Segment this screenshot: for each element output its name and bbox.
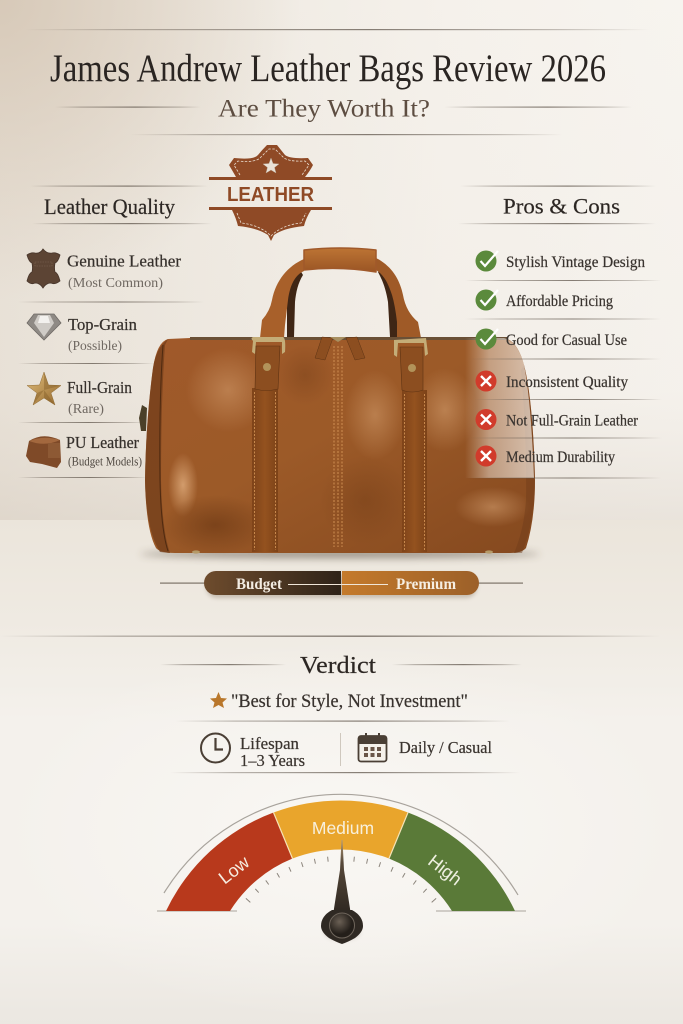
lifespan: 1–3 Years bbox=[240, 751, 305, 770]
heading: verdict: Verdict bbox=[300, 653, 376, 679]
gauge segment: low bbox=[166, 812, 292, 911]
pro: affordable pricing: Affordable Pricing bbox=[506, 293, 613, 310]
subtitle: Are They Worth It? bbox=[218, 96, 430, 122]
bottom studs bbox=[192, 550, 493, 554]
zipper pulls bbox=[315, 337, 365, 360]
con: inconsistent quality bbox=[476, 370, 628, 392]
pro: good for casual use bbox=[476, 328, 627, 350]
icon: clock bbox=[201, 734, 230, 762]
lifespan bbox=[240, 734, 305, 770]
gauge bbox=[157, 794, 526, 944]
item: genuine leather: (Most Common) bbox=[68, 275, 163, 290]
bag fade overlay bbox=[465, 338, 534, 478]
pro: stylish vintage design: Stylish Vintage Design bbox=[506, 254, 645, 271]
icon: pu leather bbox=[26, 436, 61, 468]
con: medium durability: Medium Durability bbox=[506, 449, 615, 466]
item: top-grain: Top-Grain bbox=[68, 315, 137, 334]
item: pu leather bbox=[66, 433, 142, 468]
gauge: High bbox=[424, 851, 466, 889]
leather duffel bag bbox=[139, 248, 535, 555]
right strap bbox=[394, 338, 428, 552]
center seams bbox=[334, 346, 342, 547]
icon: calendar bbox=[358, 733, 386, 762]
gauge outer arc bbox=[164, 794, 518, 895]
item: genuine leather bbox=[67, 252, 182, 290]
gauge segment: high bbox=[389, 812, 515, 911]
lifespan: Lifespan bbox=[240, 734, 299, 753]
badge text: LEATHER bbox=[227, 184, 315, 206]
item: full-grain: Full-Grain bbox=[67, 378, 132, 397]
item: full-grain: (Rare) bbox=[68, 401, 104, 416]
pro: affordable pricing bbox=[476, 290, 613, 310]
budget segment bbox=[204, 571, 341, 595]
con: medium durability bbox=[476, 446, 615, 466]
title block bbox=[25, 29, 650, 135]
panel: verdict bbox=[160, 653, 522, 773]
panel: leather quality bbox=[18, 186, 212, 478]
panel: pros and cons bbox=[458, 186, 662, 478]
item: pu leather: PU Leather bbox=[66, 433, 139, 452]
con: not full-grain leather bbox=[476, 409, 639, 430]
pro: good for casual use: Good for Casual Use bbox=[506, 332, 627, 349]
budget to premium scale: Premium bbox=[396, 576, 456, 593]
quote with star: "Best for Style, Not Investment" bbox=[231, 691, 468, 712]
left strap bbox=[252, 337, 285, 552]
bag handle bbox=[260, 248, 421, 338]
con: inconsistent quality: Inconsistent Quality bbox=[506, 374, 628, 391]
budget to premium scale: Budget bbox=[236, 576, 283, 593]
daily casual: Daily / Casual bbox=[399, 738, 492, 757]
icon: diamond bbox=[27, 314, 61, 340]
gauge segment: medium bbox=[274, 800, 408, 858]
gauge ticks bbox=[246, 857, 436, 902]
heading: pros and cons: Pros & Cons bbox=[503, 194, 620, 218]
logo: leather badge bbox=[209, 145, 332, 241]
bag shadow bbox=[140, 550, 540, 558]
premium segment bbox=[342, 571, 479, 595]
side clasp bbox=[139, 405, 147, 431]
gauge: Medium bbox=[312, 818, 374, 838]
bag shading bbox=[145, 337, 535, 555]
budget to premium scale bbox=[160, 571, 523, 598]
gauge needle bbox=[321, 840, 363, 944]
item: full-grain bbox=[67, 378, 132, 416]
item: top-grain: (Possible) bbox=[68, 338, 122, 353]
item: genuine leather: Genuine Leather bbox=[67, 252, 182, 270]
icon: gold star bbox=[27, 372, 61, 405]
bag body bbox=[145, 338, 535, 553]
gauge labels: Low bbox=[215, 851, 254, 888]
icon: leather hide bbox=[27, 249, 60, 288]
item: top-grain bbox=[68, 315, 137, 353]
icon: badge star bbox=[263, 158, 279, 173]
con: not full-grain leather: Not Full-Grain Leather bbox=[506, 412, 639, 430]
item: pu leather: (Budget Models) bbox=[68, 454, 142, 468]
pro: stylish vintage design bbox=[476, 250, 645, 272]
heading: leather quality: Leather Quality bbox=[44, 194, 175, 219]
